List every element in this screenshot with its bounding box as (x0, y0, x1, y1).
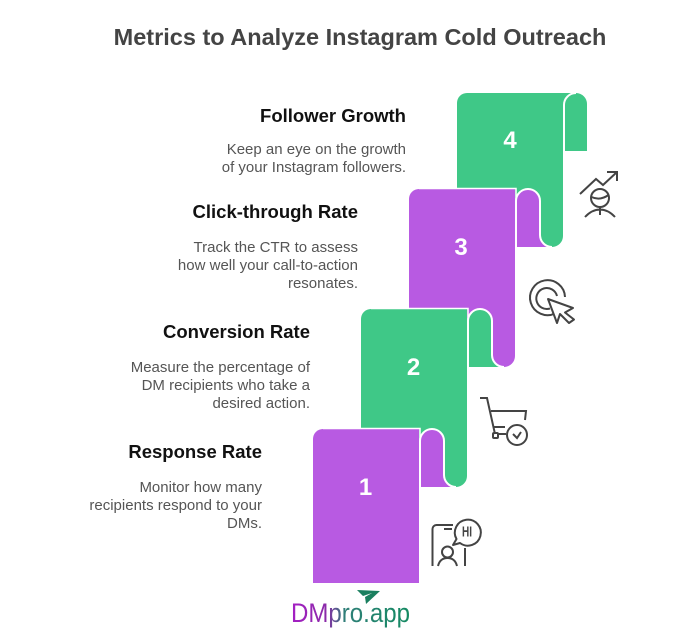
icon: click cursor (530, 280, 574, 323)
panel 3 (409, 188, 552, 367)
panel 2 (361, 308, 504, 487)
text block: Click-through Rate (178, 201, 358, 292)
logo: DMpro.app: DMpro.app (291, 598, 410, 628)
number 4: 4 (503, 127, 517, 154)
text block: Response Rate (89, 441, 262, 532)
text block: Response Rate: DMs. (227, 515, 262, 532)
text block: Follower Growth: Keep an eye on the growth (227, 141, 406, 158)
icon: phone with HI bubble (432, 520, 481, 566)
text block: Follower Growth: of your Instagram followers. (222, 159, 406, 176)
number 1: 1 (359, 474, 372, 501)
panel 1 (313, 428, 456, 583)
text block: Click-through Rate: Click-through Rate (193, 201, 358, 222)
text block: Conversion Rate: DM recipients who take a (142, 377, 310, 394)
text block: Click-through Rate: how well your call-to-action (178, 257, 358, 274)
icon: paper plane (357, 590, 380, 604)
text block: Response Rate: recipients respond to your (89, 497, 262, 514)
text block: Conversion Rate (131, 321, 310, 412)
number 2: 2 (407, 354, 420, 381)
icon: phone with HI bubble: HI (462, 524, 472, 540)
text block: Response Rate: Response Rate (128, 441, 262, 462)
panel 4 (457, 93, 587, 247)
text block: Follower Growth (222, 105, 406, 176)
text block: Conversion Rate: Conversion Rate (163, 321, 310, 342)
text block: Conversion Rate: Measure the percentage of (131, 359, 310, 376)
text block: Response Rate: Monitor how many (139, 479, 262, 496)
title: Metrics to Analyze Instagram Cold Outreach (114, 24, 606, 50)
text block: Click-through Rate: Track the CTR to assess (194, 239, 358, 256)
number 3: 3 (454, 234, 468, 261)
icon: growth person (580, 172, 617, 217)
text block: Follower Growth: Follower Growth (260, 105, 406, 126)
icon: cart with check (480, 398, 527, 445)
text block: Conversion Rate: desired action. (212, 395, 310, 412)
text block: Click-through Rate: resonates. (288, 275, 358, 292)
